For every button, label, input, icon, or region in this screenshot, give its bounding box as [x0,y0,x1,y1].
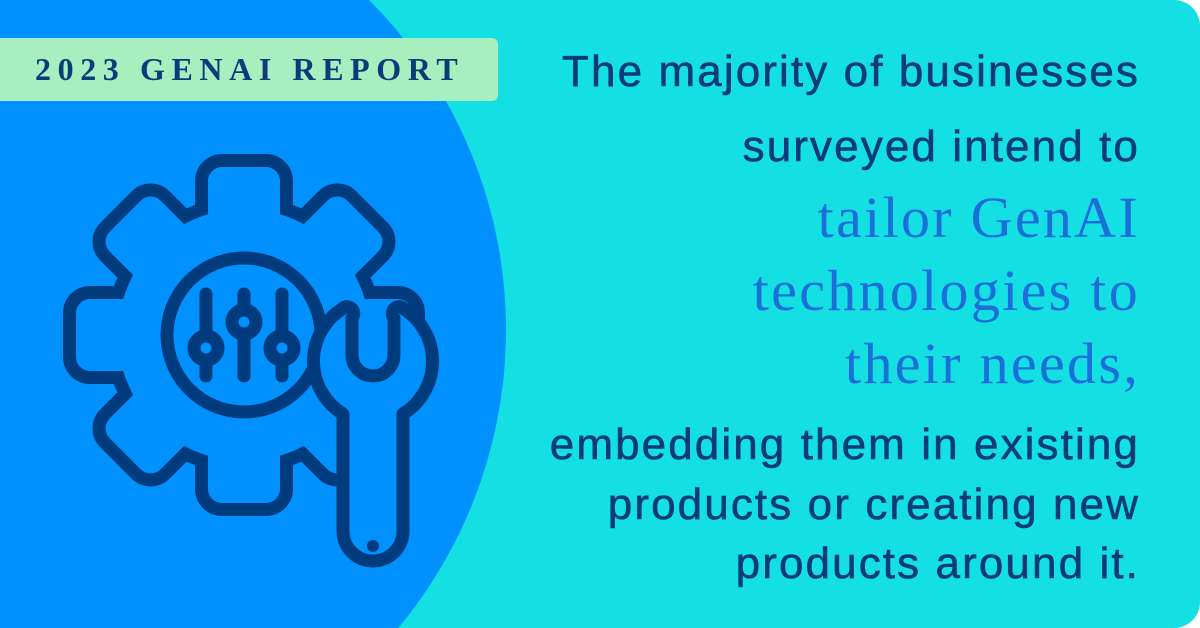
label: report tag: 2023 GENAI REPORT [35,51,464,87]
text block: statement: embedding them in existing [550,420,1140,469]
text block: statement: products around it. [736,539,1140,588]
text block: statement: their needs, [845,331,1140,396]
text block: statement: products or creating new [608,480,1140,529]
icon: gear with sliders and wrench [76,167,433,561]
text block: statement: surveyed intend to [743,122,1140,171]
text block: statement: tailor GenAI [818,185,1140,250]
text block: statement [550,47,1140,588]
text block: statement: technologies to [753,258,1140,323]
text block: statement: The majority of businesses [562,47,1140,96]
label: report tag [0,38,498,101]
